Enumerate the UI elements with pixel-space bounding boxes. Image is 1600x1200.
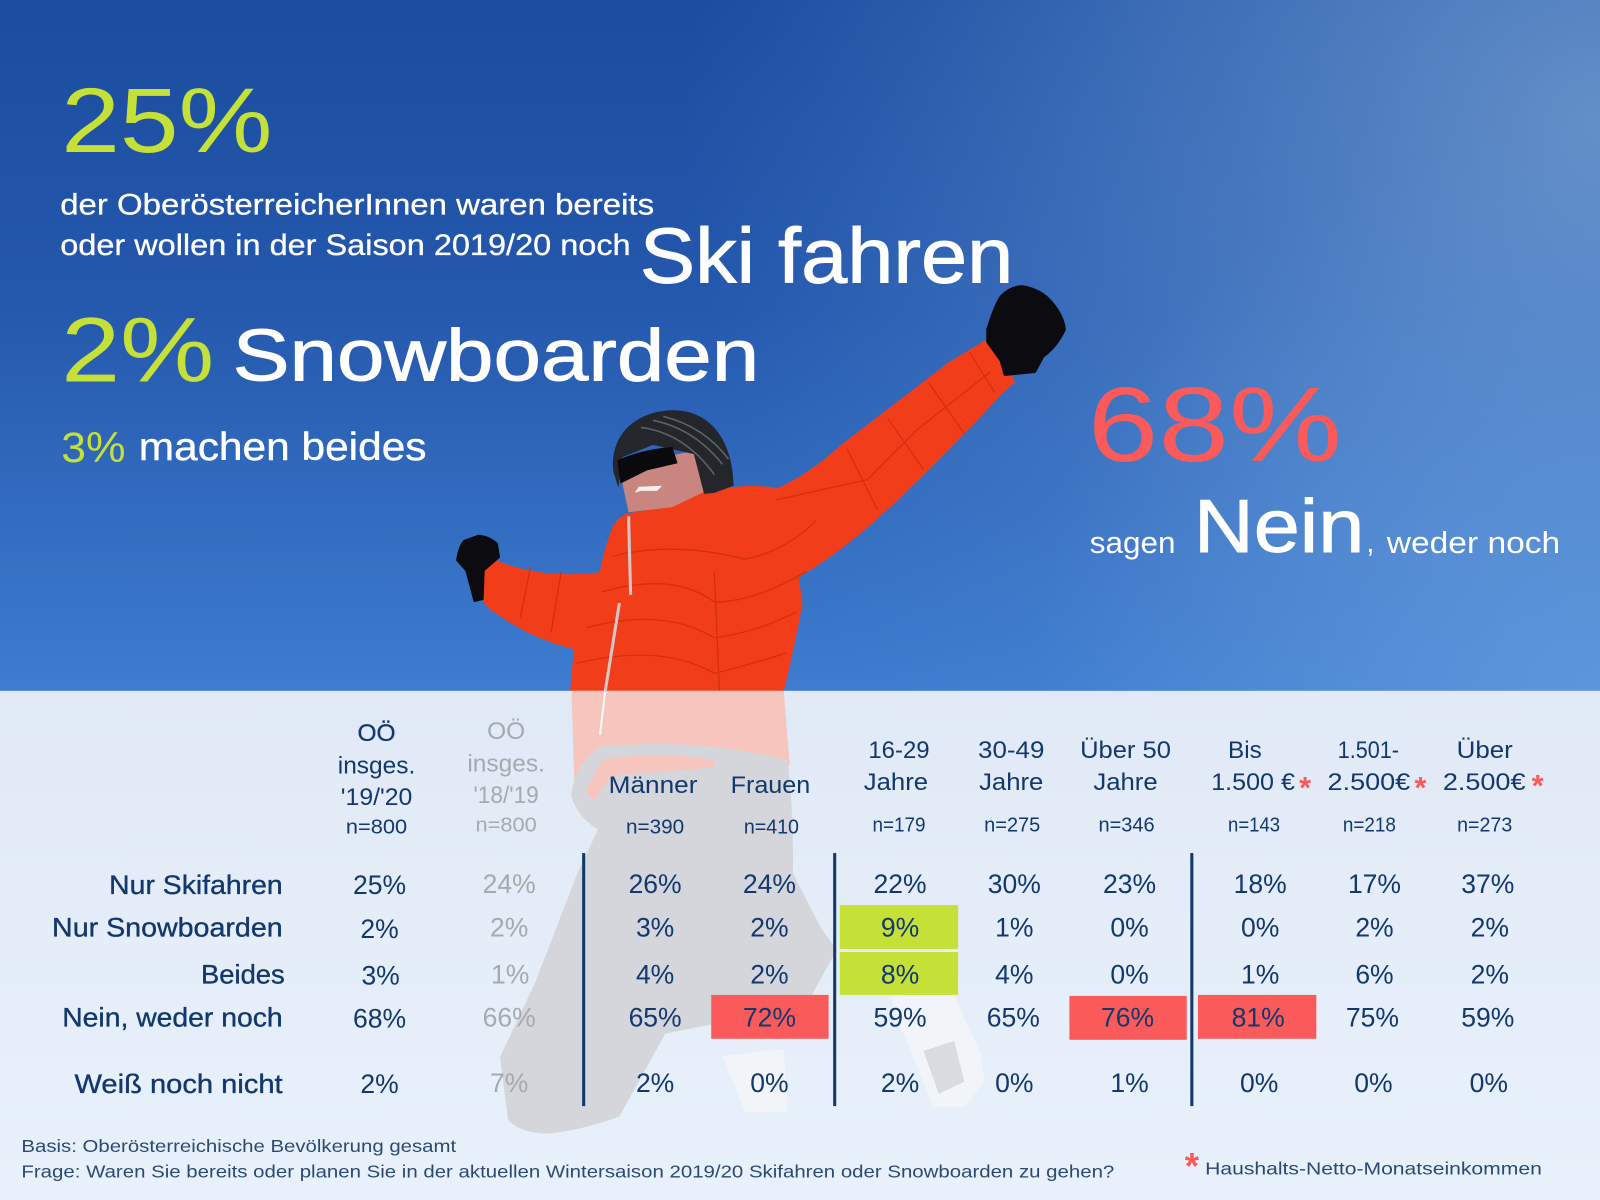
- values: Bis 1.500: 1%: [1241, 960, 1279, 990]
- values: 16-29 Jahre: 22%: [873, 869, 927, 899]
- column: OÖ 19/20: [338, 720, 415, 839]
- values: OÖ 18/19: [483, 869, 536, 1098]
- values: Über 50 Jahre: 1%: [1110, 1068, 1149, 1098]
- zipper: [605, 516, 631, 692]
- column: 16-29 Jahre: 16-29: [868, 737, 930, 764]
- values: Frauen: 2%: [750, 913, 789, 943]
- values: OÖ 18/19: 7%: [490, 1068, 528, 1098]
- table header: [338, 718, 1544, 839]
- values: Frauen: 0%: [750, 1068, 789, 1098]
- left glove: [457, 536, 499, 601]
- values: OÖ 19/20: 25%: [353, 870, 406, 900]
- values: OÖ 18/19: 24%: [483, 869, 536, 899]
- column: Frauen: n=410: [744, 817, 799, 839]
- values: Männer: 3%: [636, 913, 674, 943]
- values: OÖ 19/20: 2%: [360, 914, 399, 944]
- values: Männer: 2%: [636, 1068, 674, 1098]
- values: Frauen: 72%: [743, 1003, 796, 1033]
- heading: Ski fahren: Ski fahren: [640, 214, 1013, 300]
- values: Über 2.500: 2%: [1471, 913, 1509, 943]
- stat: 68% Nein: sagen: [1090, 526, 1176, 560]
- column: 30-49 Jahre: [978, 737, 1044, 837]
- smile: [635, 486, 662, 493]
- text: der OberösterreicherInnen: [60, 188, 654, 262]
- column dividers: [582, 853, 1193, 1106]
- column: OÖ 18/19: [467, 718, 545, 837]
- values: Über 50 Jahre: 23%: [1103, 869, 1156, 899]
- column: OÖ 19/20: '19/'20: [341, 784, 412, 811]
- values: 16-29 Jahre: [873, 869, 927, 1098]
- values: Frauen: 24%: [743, 869, 796, 899]
- values: Über 2.500: 59%: [1461, 1003, 1514, 1033]
- column: 30-49 Jahre: n=275: [984, 815, 1040, 837]
- row labels: Nein, weder noch: [62, 1003, 283, 1033]
- glasses: [617, 447, 678, 484]
- values: Über 50 Jahre: 76%: [1101, 1003, 1154, 1033]
- column: Männer: [609, 772, 697, 839]
- values: 16-29 Jahre: 2%: [881, 1068, 919, 1098]
- stat: 68% Nein: weder noch: [1386, 526, 1560, 560]
- column: OÖ 18/19: n=800: [476, 815, 537, 837]
- values: Männer: 4%: [636, 960, 674, 990]
- values: Über 50 Jahre: [1101, 869, 1156, 1098]
- values: Bis 1.500: 81%: [1232, 1003, 1285, 1033]
- stat: 2% Snowboarden: 2%: [61, 300, 214, 402]
- values: 30-49 Jahre: 4%: [995, 960, 1033, 990]
- values: Frauen: [743, 869, 796, 1098]
- jacket: [478, 342, 1013, 694]
- values: 1.501-2.500: 75%: [1346, 1003, 1399, 1033]
- stat: 3% machen beides: 3%: [61, 424, 126, 472]
- row labels: Nur Skifahren: [109, 870, 283, 900]
- values: Über 50 Jahre: 0%: [1110, 960, 1149, 990]
- values: 1.501-2.500: [1346, 869, 1401, 1098]
- values: 16-29 Jahre: 59%: [873, 1003, 927, 1033]
- right glove: [988, 287, 1064, 374]
- column: 1.501-2.500: 1.501-: [1338, 737, 1399, 764]
- helmet: [613, 410, 734, 494]
- panel: table background: [0, 691, 1600, 1200]
- stat: 2% Snowboarden: [61, 300, 759, 402]
- row labels: Beides: [201, 960, 285, 990]
- values: Bis 1.500: [1232, 869, 1287, 1098]
- values: Männer: 65%: [629, 1003, 682, 1033]
- values: Über 2.500: 0%: [1470, 1068, 1508, 1098]
- values: 30-49 Jahre: 1%: [995, 913, 1033, 943]
- values: OÖ 19/20: 3%: [361, 961, 400, 991]
- photo: cheering skier, upper body: [457, 287, 1064, 694]
- stat: 68% Nein: ,: [1366, 527, 1374, 559]
- values: OÖ 19/20: 68%: [353, 1004, 406, 1034]
- values: 30-49 Jahre: 65%: [987, 1003, 1040, 1033]
- values: 16-29 Jahre: 9%: [881, 913, 919, 943]
- stat: 68% Nein: Nein: [1194, 485, 1364, 569]
- values: Männer: 26%: [629, 869, 682, 899]
- stat: 2% Snowboarden: Snowboarden: [233, 314, 759, 397]
- column: 1.501-2.500: 2.500€: [1328, 769, 1411, 796]
- values: Frauen: 2%: [750, 960, 789, 990]
- photo: skier seen through the panel: [500, 691, 985, 1134]
- column: Bis 1.500: [1211, 737, 1311, 837]
- column: 1.501-2.500: n=218: [1343, 815, 1396, 837]
- highlight cells: [711, 905, 1316, 1040]
- column: Über 2.500: n=273: [1457, 815, 1512, 837]
- face: [622, 449, 704, 512]
- column: Über 2.500: Über: [1457, 737, 1513, 764]
- column: Über 50 Jahre: Über 50: [1080, 737, 1171, 764]
- column: Männer: Männer: [609, 772, 697, 799]
- stat: 25% Ski fahren: [60, 70, 1013, 300]
- column: Über 50 Jahre: n=346: [1098, 815, 1155, 837]
- values: OÖ 19/20: 2%: [360, 1069, 399, 1099]
- values: 1.501-2.500: 6%: [1355, 960, 1394, 990]
- values: OÖ 18/19: 1%: [491, 960, 529, 990]
- column: OÖ 18/19: '18/'19: [473, 782, 539, 809]
- column: Frauen: [731, 772, 810, 839]
- values: Männer: [629, 869, 682, 1098]
- stat: 3% machen beides: [61, 424, 427, 472]
- column: Männer: n=390: [626, 817, 684, 839]
- footnote: basis and question: [21, 1136, 1114, 1182]
- column: 1.501-2.500: [1328, 737, 1426, 837]
- values: 30-49 Jahre: 30%: [988, 869, 1041, 899]
- stat: 68% Nein: 68%: [1088, 366, 1342, 484]
- column: Bis 1.500: Bis: [1228, 737, 1262, 764]
- column: Über 50 Jahre: [1080, 737, 1171, 837]
- number 25%: 25%: [61, 70, 272, 172]
- values: Bis 1.500: 0%: [1240, 1068, 1278, 1098]
- footnote: basis and question: Frage: Waren Sie bereits oder planen Sie in der aktuellen Wintersaison 2019/20 Skifahren oder Snowboarden zu gehen?: [21, 1162, 1114, 1182]
- row labels: [52, 870, 285, 1099]
- values: Bis 1.500: 0%: [1241, 913, 1279, 943]
- values: 30-49 Jahre: 0%: [995, 1068, 1033, 1098]
- column: Bis 1.500: 1.500 €: [1211, 769, 1295, 796]
- stat: 68% Nein: [1088, 366, 1560, 569]
- column: 30-49 Jahre: Jahre: [979, 769, 1043, 796]
- values: Über 2.500: 2%: [1471, 960, 1509, 990]
- column: 16-29 Jahre: [864, 737, 930, 837]
- column: Über 2.500: *: [1532, 769, 1544, 803]
- values: 16-29 Jahre: 8%: [881, 960, 919, 990]
- footnote: income asterisk: *: [1185, 1146, 1200, 1187]
- values: OÖ 18/19: 2%: [490, 913, 528, 943]
- column: Über 2.500: 2.500€: [1443, 769, 1526, 796]
- values: Über 2.500: [1461, 869, 1514, 1098]
- column: OÖ 18/19: OÖ: [487, 718, 525, 745]
- values: 1.501-2.500: 2%: [1355, 913, 1394, 943]
- column: OÖ 19/20: insges.: [338, 752, 415, 779]
- values: OÖ 18/19: 66%: [483, 1003, 536, 1033]
- column: Über 50 Jahre: Jahre: [1093, 769, 1158, 796]
- row labels: Nur Snowboarden: [52, 913, 283, 943]
- column: OÖ 19/20: OÖ: [357, 720, 396, 747]
- row labels: Weiß noch nicht: [74, 1069, 283, 1099]
- values: Bis 1.500: 18%: [1234, 869, 1287, 899]
- text: der OberösterreicherInnen: der OberösterreicherInnen waren bereits: [60, 188, 654, 221]
- footnote: income asterisk: Haushalts-Netto-Monatseinkommen: [1205, 1158, 1542, 1178]
- column: 30-49 Jahre: 30-49: [978, 737, 1044, 764]
- column: Über 2.500: [1443, 737, 1544, 837]
- stat: 3% machen beides: machen beides: [139, 426, 427, 469]
- values: Über 50 Jahre: 0%: [1110, 913, 1149, 943]
- values: 1.501-2.500: 0%: [1354, 1068, 1393, 1098]
- column: 1.501-2.500: *: [1414, 771, 1426, 805]
- values: 1.501-2.500: 17%: [1348, 869, 1401, 899]
- column: Frauen: Frauen: [731, 772, 810, 799]
- column: 16-29 Jahre: Jahre: [864, 769, 928, 796]
- text: der OberösterreicherInnen: oder wollen in der Saison 2019/20 noch: [60, 229, 631, 262]
- column: 16-29 Jahre: n=179: [872, 815, 926, 837]
- column: Bis 1.500: n=143: [1228, 815, 1280, 837]
- column: OÖ 19/20: n=800: [346, 817, 407, 839]
- footnote: income asterisk: [1185, 1146, 1542, 1187]
- column: Bis 1.500: *: [1299, 771, 1311, 805]
- values: OÖ 19/20: [353, 870, 406, 1099]
- column: OÖ 18/19: insges.: [467, 750, 545, 777]
- values: 30-49 Jahre: [987, 869, 1041, 1098]
- values: Über 2.500: 37%: [1461, 869, 1514, 899]
- footnote: basis and question: Basis: Oberösterreichische Bevölkerung gesamt: [21, 1136, 456, 1156]
